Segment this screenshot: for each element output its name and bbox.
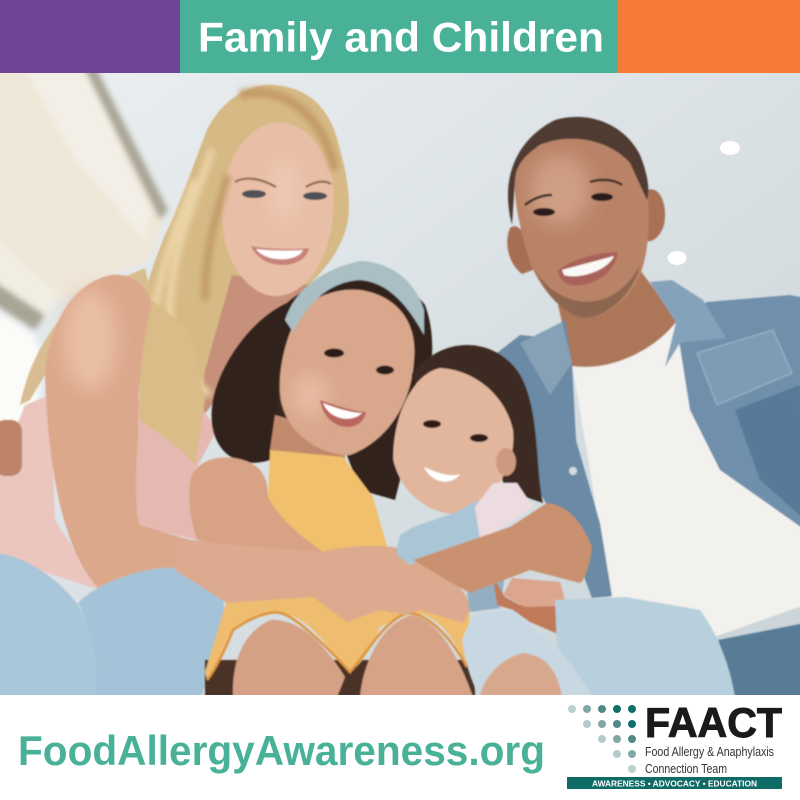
man jeans (718, 623, 800, 700)
woman hair lock over arm (140, 300, 205, 465)
man eyes (533, 208, 555, 216)
woman jeans right leg (78, 568, 225, 700)
younger girl face (393, 368, 513, 514)
man white tee (572, 322, 800, 650)
title: Family and Children (198, 14, 604, 60)
older girl yellow dress (227, 450, 395, 610)
family photo illustration (0, 60, 800, 700)
logo name line 1: Food Allergy & Anaphylaxis (645, 745, 774, 759)
man head (514, 135, 649, 318)
man hair (508, 117, 648, 225)
younger girl ear (496, 448, 516, 476)
older girl neck and chest (270, 415, 345, 460)
older girl left arm (189, 457, 323, 575)
footer white band (0, 695, 800, 800)
younger girl (393, 345, 735, 697)
woman face (222, 122, 334, 296)
man (497, 117, 800, 700)
logo tagline bar (567, 777, 782, 789)
woman thin hair over shoulder (20, 268, 150, 405)
woman forearm and hand (175, 540, 472, 623)
woman smile (251, 246, 309, 265)
logo name line 2: Connection Team (645, 762, 727, 776)
older girl headband (285, 261, 424, 335)
man jacket button (569, 467, 577, 475)
woman hair strands (150, 93, 335, 450)
younger girl jeans (555, 597, 735, 697)
older girl curly hair (212, 277, 432, 500)
man jacket pocket (697, 330, 792, 405)
ceiling lights (720, 141, 740, 155)
header band: orange block (618, 0, 800, 73)
older girl (175, 261, 475, 697)
woman eyes (242, 190, 266, 198)
younger girl arm and hand (413, 503, 592, 593)
younger girl eyes (423, 420, 441, 428)
younger girl overalls (397, 500, 482, 565)
older girl eyes (324, 348, 344, 358)
woman left hand (0, 420, 22, 476)
man neck (558, 270, 676, 367)
man jacket collar right (650, 280, 726, 367)
woman torso pink top right (135, 400, 217, 540)
older girl skirt (205, 600, 470, 680)
man jacket collar left (520, 322, 572, 395)
logo wordmark: FAACT (645, 699, 782, 746)
skirt hem line (207, 612, 467, 680)
header band: purple block (0, 0, 180, 73)
woman (0, 85, 349, 700)
older girl face (280, 290, 414, 455)
man smile (558, 252, 618, 285)
woman torso pink top left (0, 395, 100, 590)
room background (0, 60, 800, 695)
younger girl smile (424, 467, 460, 482)
younger girl rolled cuff (462, 610, 593, 697)
older girl left knee (233, 620, 345, 697)
younger girl leg (480, 653, 562, 697)
younger girl lower bib (467, 575, 505, 612)
header band: teal title block (180, 0, 618, 73)
younger girl hair (412, 345, 543, 503)
man denim jacket right (676, 295, 800, 530)
man fingers and child leg (493, 577, 565, 637)
logo tagline: AWARENESS • ADVOCACY • EDUCATION (592, 778, 757, 788)
woman shoulder and arm (44, 274, 226, 603)
FAACT logo (567, 699, 782, 789)
dark gap under skirt (205, 660, 475, 696)
younger girl pink sleeve (475, 483, 533, 540)
logo dot grid (568, 705, 636, 773)
man brows (525, 180, 622, 205)
older girl smile (320, 400, 366, 427)
woman brows (235, 179, 331, 187)
woman hair back (139, 84, 350, 388)
older girl right knee (360, 615, 473, 697)
woman neck and chest (200, 275, 310, 420)
man left ear (507, 226, 533, 274)
man stubble shadow (533, 265, 640, 318)
man right ear (646, 189, 665, 241)
man denim jacket left (497, 320, 612, 598)
woman jeans left leg (0, 553, 103, 700)
website url: FoodAllergyAwareness.org (18, 727, 545, 774)
